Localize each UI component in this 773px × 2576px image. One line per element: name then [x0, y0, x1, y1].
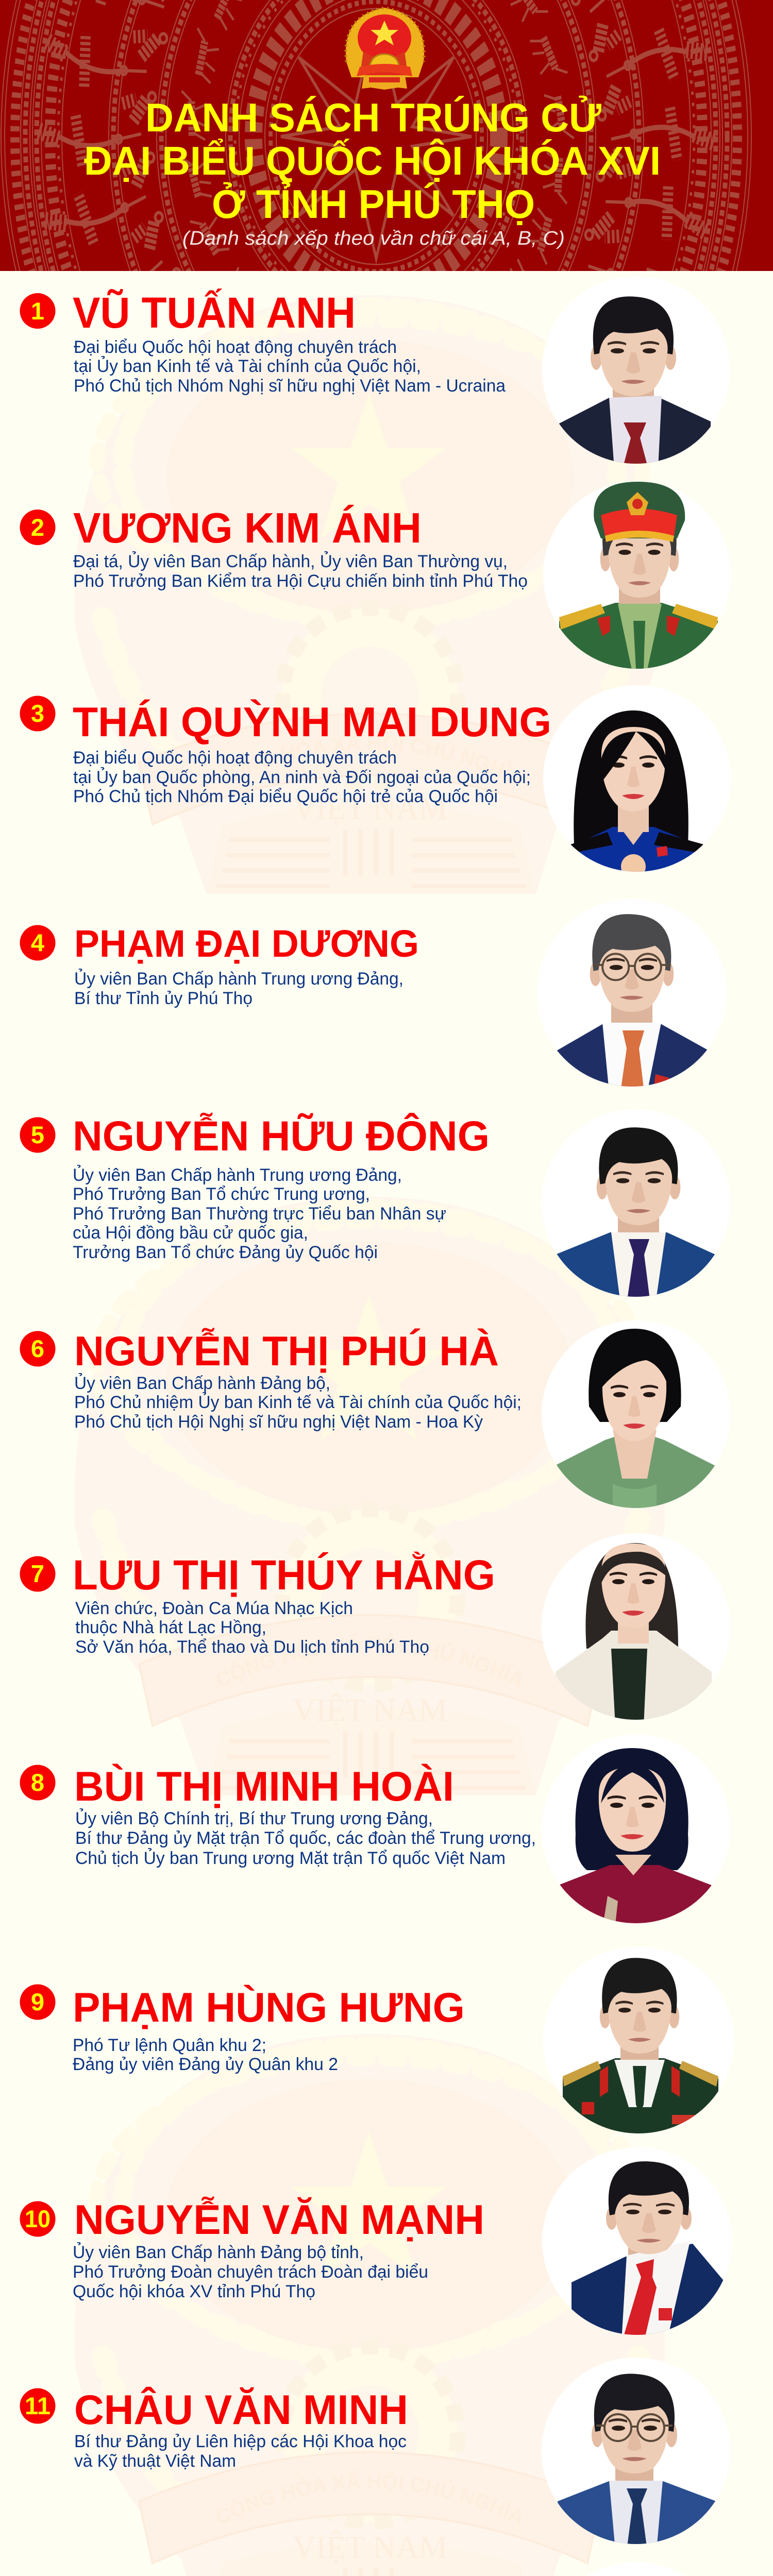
number badge 2: [20, 510, 56, 545]
portrait 3: [543, 685, 731, 879]
number badge 5: [20, 1117, 56, 1153]
description 1: Phó Chủ tịch Nhóm Nghị sĩ hữu nghị Việt Nam - Ucraina: [74, 376, 506, 396]
description 5: [73, 1165, 446, 1262]
description 9: Đảng ủy viên Đảng ủy Quân khu 2: [73, 2055, 338, 2074]
number badge 10: [20, 2201, 56, 2237]
panel: 2 Vương Kim Ánh: [20, 481, 731, 675]
description 5: Phó Trưởng Ban Thường trực Tiểu ban Nhân sự: [73, 1204, 446, 1224]
name 10: NGUYỄN VĂN MẠNH: [74, 2196, 484, 2243]
title: Ở TỈNH PHÚ THỌ: [212, 181, 535, 227]
title: DANH SÁCH TRÚNG CỬ: [145, 95, 601, 140]
number badge 9: 9: [31, 1988, 44, 2015]
portrait 4: [537, 899, 727, 1092]
description 6: Phó Chủ nhiệm Ủy ban Kinh tế và Tài chính của Quốc hội;: [74, 1393, 522, 1412]
background watermark emblem 3: VIỆT NAM: [293, 2530, 447, 2565]
description 1: Đại biểu Quốc hội hoạt động chuyên trách: [74, 337, 397, 357]
number badge 6: [20, 1331, 56, 1366]
panel: 6 Nguyễn Thị Phú Hà: [20, 1320, 730, 1515]
portrait 10: [542, 2147, 732, 2342]
panel: 3 Thái Quỳnh Mai Dung: [20, 685, 731, 879]
portrait 2: [543, 481, 731, 675]
panel: 9 Phạm Hùng Hưng: [20, 1947, 734, 2141]
description 6: [74, 1374, 522, 1432]
name 8: BÙI THỊ MINH HOÀI: [74, 1763, 454, 1810]
portrait 5: [542, 1109, 730, 1303]
name 1: VŨ TUẤN ANH: [73, 289, 356, 337]
name 2: VƯƠNG KIM ÁNH: [73, 504, 422, 552]
description 7: thuộc Nhà hát Lạc Hồng,: [75, 1618, 266, 1637]
title: [84, 95, 661, 227]
portrait 8: [542, 1735, 730, 1929]
background watermark emblem 1: VIỆT NAM: [293, 791, 447, 826]
description 4: [74, 969, 404, 1008]
description 5: Phó Trưởng Ban Tổ chức Trung ương,: [73, 1184, 370, 1204]
name 7: LƯU THỊ THÚY HẰNG: [73, 1552, 495, 1599]
name 9: PHẠM HÙNG HƯNG: [73, 1984, 465, 2031]
number badge 3: [20, 696, 56, 732]
description 7: Sở Văn hóa, Thể thao và Du lịch tỉnh Phú Thọ: [75, 1637, 429, 1657]
description 7: [75, 1599, 429, 1657]
description 8: [75, 1809, 536, 1868]
background watermark emblem 3: [89, 2036, 650, 2576]
panel: 10 Nguyễn Văn Mạnh: [20, 2147, 732, 2342]
number badge 9: [20, 1985, 56, 2020]
description 11: [74, 2432, 407, 2471]
name 4: PHẠM ĐẠI DƯƠNG: [74, 922, 419, 965]
description 10: Phó Trưởng Đoàn chuyên trách Đoàn đại biểu: [73, 2262, 428, 2282]
background watermark emblem 1: CỘNG HÒA XÃ HỘI CHỦ NGHĨA: [212, 731, 528, 790]
description 9: [73, 2036, 338, 2074]
description 8: Bí thư Đảng ủy Mặt trận Tổ quốc, các đoàn thể Trung ương,: [75, 1828, 536, 1848]
description 8: Chủ tịch Ủy ban Trung ương Mặt trận Tổ quốc Việt Nam: [75, 1849, 506, 1868]
panel: 11 Châu Văn Minh: [20, 2358, 730, 2550]
number badge 7: 7: [31, 1560, 44, 1587]
panel: 1 Vũ Tuấn Anh: [20, 276, 730, 469]
description 10: Quốc hội khóa XV tỉnh Phú Thọ: [73, 2282, 315, 2301]
number badge 8: 8: [31, 1769, 44, 1796]
description 11: Bí thư Đảng ủy Liên hiệp các Hội Khoa học: [74, 2432, 407, 2451]
number badge 8: [20, 1765, 56, 1800]
number badge 3: 3: [31, 700, 44, 727]
name 5: NGUYỄN HỮU ĐÔNG: [73, 1113, 490, 1160]
number badge 6: 6: [31, 1335, 44, 1362]
number badge 4: [20, 925, 56, 960]
number badge 1: [20, 293, 56, 329]
description 2: Đại tá, Ủy viên Ban Chấp hành, Ủy viên Ban Thường vụ,: [73, 552, 508, 571]
number badge 5: 5: [31, 1121, 44, 1148]
description 10: Ủy viên Ban Chấp hành Đảng bộ tỉnh,: [73, 2243, 364, 2262]
title: ĐẠI BIỂU QUỐC HỘI KHÓA XVI: [84, 138, 661, 183]
background watermark emblem 2: CỘNG HÒA XÃ HỘI CHỦ NGHĨA: [212, 1632, 528, 1692]
name 3: THÁI QUỲNH MAI DUNG: [73, 699, 551, 745]
description 3: Phó Chủ tịch Nhóm Đại biểu Quốc hội trẻ của Quốc hội: [73, 787, 498, 806]
description 6: Phó Chủ tịch Hội Nghị sĩ hữu nghị Việt Nam - Hoa Kỳ: [74, 1412, 483, 1432]
number badge 1: 1: [31, 297, 44, 325]
description 10: [73, 2243, 428, 2301]
icon: national emblem: [346, 8, 424, 90]
description 1: [74, 337, 506, 396]
background watermark emblem 2: VIỆT NAM: [293, 1693, 447, 1728]
number badge 7: [20, 1556, 56, 1592]
name 11: CHÂU VĂN MINH: [74, 2386, 408, 2433]
description 3: tại Ủy ban Quốc phòng, An ninh và Đối ngoại của Quốc hội;: [73, 768, 531, 787]
description 7: Viên chức, Đoàn Ca Múa Nhạc Kịch: [75, 1599, 353, 1618]
panel: 7 Lưu Thị Thúy Hằng: [20, 1533, 730, 1726]
description 2: Phó Trưởng Ban Kiểm tra Hội Cựu chiến binh tỉnh Phú Thọ: [73, 571, 528, 591]
description 3: Đại biểu Quốc hội hoạt động chuyên trách: [73, 748, 397, 768]
description 5: Trưởng Ban Tổ chức Đảng ủy Quốc hội: [73, 1243, 378, 1262]
description 11: và Kỹ thuật Việt Nam: [74, 2451, 236, 2471]
header banner with drum pattern: [0, 0, 773, 271]
number badge 11: [20, 2388, 56, 2424]
panel: 8 Bùi Thị Minh Hoài: [20, 1735, 730, 1929]
subtitle: (Danh sách xếp theo vần chữ cái A, B, C): [182, 228, 565, 249]
name 6: NGUYỄN THỊ PHÚ HÀ: [74, 1328, 499, 1375]
background watermark emblem 2: [89, 1199, 650, 1795]
description 2: [73, 552, 528, 591]
description 5: Ủy viên Ban Chấp hành Trung ương Đảng,: [73, 1165, 402, 1185]
portrait 1: [542, 276, 730, 469]
description 5: của Hội đồng bầu cử quốc gia,: [73, 1223, 308, 1243]
panel: 4 Phạm Đại Dương: [20, 899, 727, 1092]
number badge 11: 11: [25, 2392, 51, 2419]
panel: 5 Nguyễn Hữu Đông: [20, 1109, 730, 1303]
description 8: Ủy viên Bộ Chính trị, Bí thư Trung ương Đảng,: [75, 1809, 433, 1828]
portrait 12: [542, 2562, 730, 2576]
description 3: [73, 748, 531, 806]
background watermark emblem 3: CỘNG HÒA XÃ HỘI CHỦ NGHĨA: [212, 2469, 528, 2529]
background watermark emblem 1: [89, 297, 651, 894]
portrait 6: [542, 1320, 730, 1515]
number badge 2: 2: [31, 514, 44, 541]
description 4: Bí thư Tỉnh ủy Phú Thọ: [74, 989, 253, 1008]
portrait 9: [543, 1947, 734, 2141]
number badge 10: 10: [25, 2205, 51, 2232]
number badge 4: 4: [31, 929, 44, 956]
portrait 7: [542, 1533, 730, 1726]
description 4: Ủy viên Ban Chấp hành Trung ương Đảng,: [74, 969, 404, 989]
description 1: tại Ủy ban Kinh tế và Tài chính của Quốc hội,: [74, 357, 421, 376]
description 6: Ủy viên Ban Chấp hành Đảng bộ,: [74, 1374, 330, 1393]
panel: 12 Bùi Thanh Nam: [20, 2562, 730, 2576]
description 9: Phó Tư lệnh Quân khu 2;: [73, 2036, 266, 2055]
portrait 11: [542, 2358, 730, 2550]
